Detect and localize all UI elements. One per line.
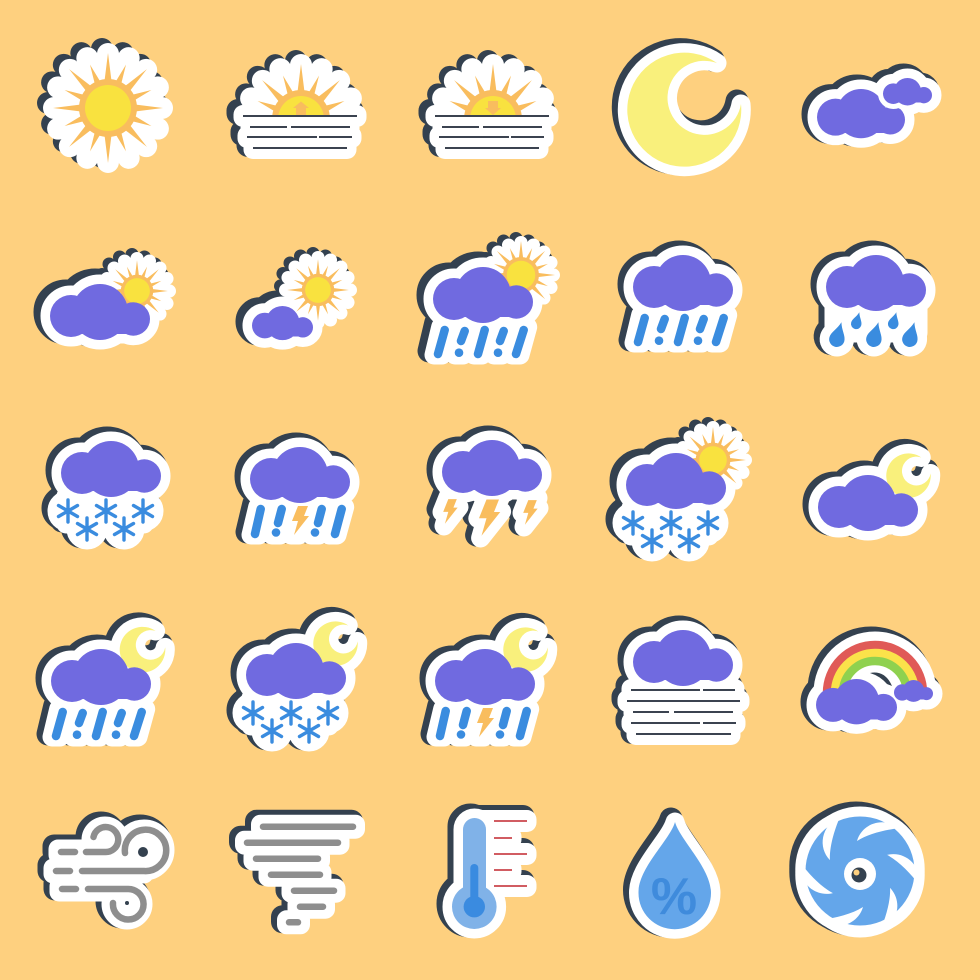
icon: sunrise <box>231 50 366 184</box>
icon: humidity drop: % <box>651 868 697 926</box>
icon: rain with lightning <box>246 444 350 537</box>
icon: cloudy night <box>814 450 931 531</box>
icon: thermometer <box>448 815 527 929</box>
icon: heavy rain <box>629 252 733 345</box>
icon: night snow <box>238 618 358 742</box>
icon: two clouds <box>813 75 932 138</box>
icon: night thunder rain <box>431 624 548 739</box>
icon: sun with snow <box>617 417 752 552</box>
icon: cloud with sun <box>45 248 176 340</box>
icon: crescent moon <box>623 50 741 167</box>
icon: hurricane <box>783 798 933 943</box>
icon: rain drops <box>822 252 926 349</box>
icon: humidity drop <box>634 819 711 929</box>
icon: fog cloud <box>623 627 740 736</box>
icon: thunderstorm <box>438 437 542 538</box>
icon: night rain <box>47 624 165 739</box>
icon: wind <box>49 823 166 920</box>
icon: sun <box>37 38 173 173</box>
icon: snow cloud <box>53 438 161 540</box>
icon: sun with small cloud <box>247 247 357 340</box>
icon: rainbow <box>812 638 933 724</box>
icon: sunset <box>423 50 558 184</box>
icon: sun shower <box>428 232 560 357</box>
icon: tornado <box>240 821 356 925</box>
